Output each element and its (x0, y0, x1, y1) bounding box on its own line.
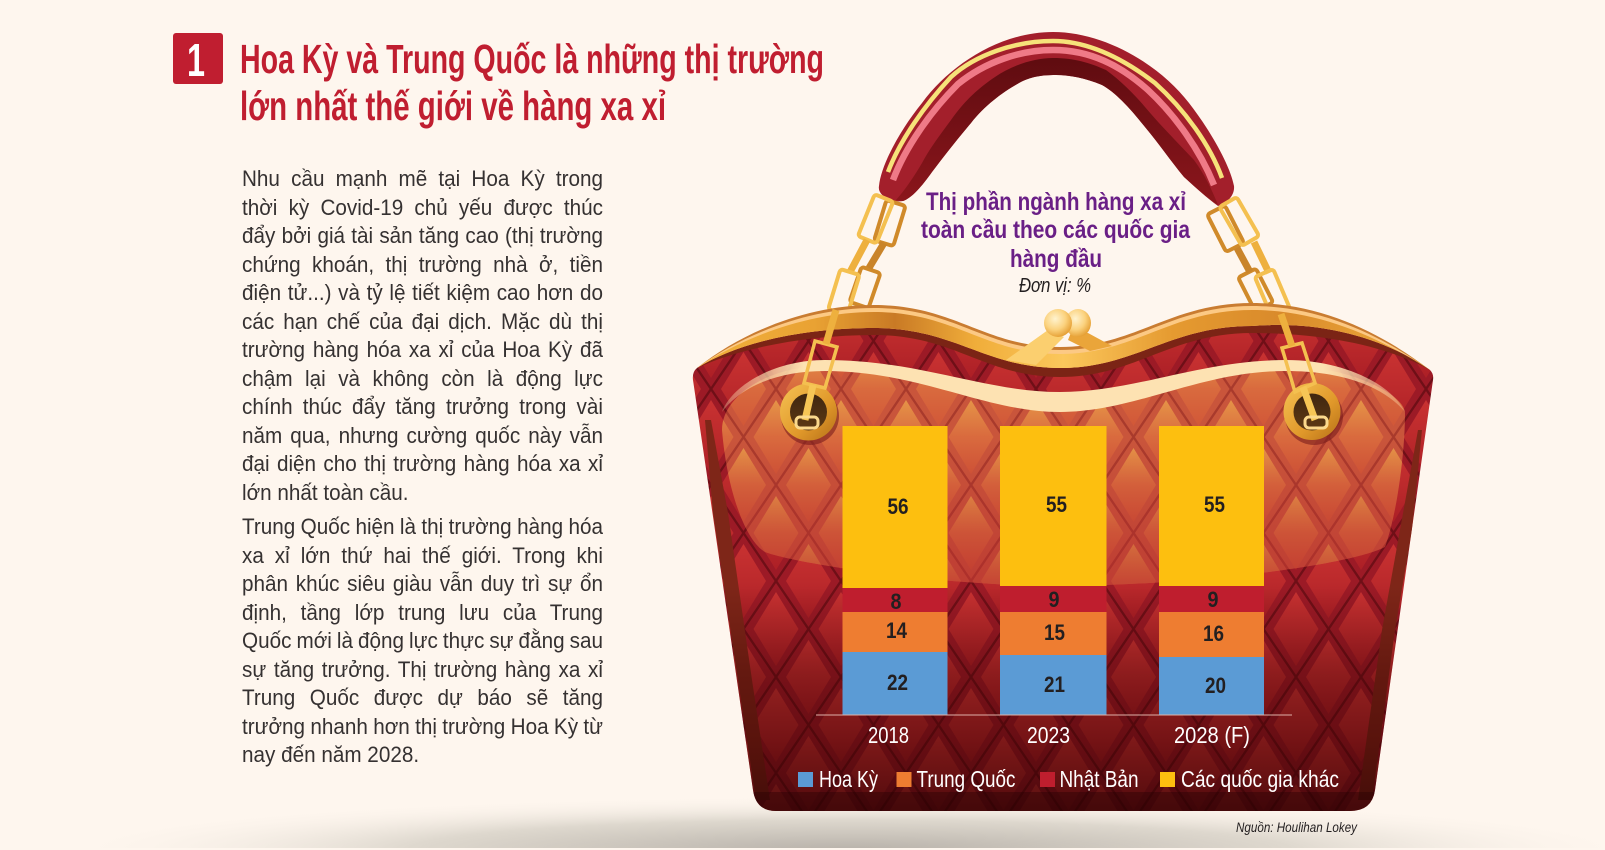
chart title: toàn cầu theo các quốc gia (921, 216, 1191, 244)
body paragraph 1 (242, 166, 603, 505)
cream wave band (722, 360, 1405, 412)
lower shading (726, 600, 1402, 811)
value labels: 16 (1203, 621, 1224, 646)
right grommet (1281, 314, 1343, 445)
bar 2028 (1159, 426, 1264, 715)
value labels: 21 (1044, 672, 1065, 697)
value labels: 20 (1205, 673, 1226, 698)
chart title: Thị phần ngành hàng xa xỉ (926, 188, 1186, 216)
chart title: hàng đầu (1010, 245, 1102, 273)
year labels: 2023 (1027, 722, 1070, 748)
legend (798, 766, 1339, 792)
value labels: 55 (1046, 492, 1067, 517)
body paragraph 1: thời kỳ Covid-19 chủ yếu được thúc (242, 195, 603, 220)
inner light panel (722, 366, 1405, 586)
bar 2023 (1000, 426, 1106, 715)
value labels (886, 492, 1226, 698)
axis line (816, 714, 1292, 716)
body paragraph 2: Trung Quốc được dự báo sẽ tăng (242, 685, 603, 710)
gold frame (697, 303, 1430, 377)
chart title (921, 188, 1191, 273)
body paragraph 2: xa xỉ lớn thứ hai thế giới. Trong khi (242, 543, 603, 568)
body paragraph 1: năm qua, nhưng cường quốc này vẫn (242, 423, 603, 448)
legend: Nhật Bản (1060, 766, 1138, 792)
body paragraph 2: trưởng nhanh hơn thị trường Hoa Kỳ từ (242, 714, 603, 739)
value labels: 9 (1208, 587, 1218, 612)
year labels (868, 722, 1250, 748)
body paragraph 1: Nhu cầu mạnh mẽ tại Hoa Kỳ trong (242, 166, 603, 191)
side seams (705, 420, 770, 800)
title: Hoa Kỳ và Trung Quốc là những thị trường (240, 36, 824, 82)
value labels: 15 (1044, 620, 1065, 645)
body paragraph 1: lớn nhất toàn cầu. (242, 480, 408, 505)
floor shadow (0, 790, 1605, 848)
legend: Các quốc gia khác (1181, 766, 1339, 792)
stacked bar chart (816, 426, 1292, 748)
body paragraph 1: các hạn chế của đại dịch. Mặc dù thị (242, 309, 603, 334)
body paragraph 1: điện tử...) và tỷ lệ tiết kiệm cao hơn do (242, 280, 603, 305)
year labels: 2028 (F) (1174, 722, 1250, 748)
legend: Trung Quốc (916, 766, 1016, 792)
source note: Nguồn: Houlihan Lokey (1236, 819, 1358, 835)
body paragraph 2: phân khúc siêu giàu vẫn duy trì sự ổn (242, 571, 603, 596)
title (240, 36, 824, 129)
year labels: 2018 (868, 722, 909, 748)
legend: Hoa Kỳ (819, 766, 878, 792)
handle (879, 32, 1234, 206)
section number badge: 1 (187, 34, 205, 86)
value labels: 55 (1204, 492, 1225, 517)
value labels: 9 (1048, 587, 1060, 612)
right chain (1207, 197, 1290, 316)
body paragraph 2: nay đến năm 2028. (242, 742, 419, 767)
bag body (692, 325, 1434, 811)
body paragraph 1: chậm lại và không còn là động lực (242, 366, 603, 391)
body paragraph 2 (242, 514, 603, 767)
body paragraph 1: đại diện cho thị trường hàng hóa xa xỉ (242, 451, 603, 476)
chart unit: Đơn vị: % (1019, 275, 1091, 297)
body paragraph 1: đẩy bởi giá tài sản tăng cao (thị trường (242, 223, 603, 248)
body paragraph 2: định, tầng lớp trung lưu của Trung (242, 600, 603, 625)
body paragraph 1: chính thúc đẩy tăng trưởng trong vài (242, 394, 603, 419)
section number badge (173, 33, 223, 86)
value labels: 8 (890, 589, 902, 614)
value labels: 22 (887, 670, 908, 695)
title: lớn nhất thế giới về hàng xa xỉ (240, 83, 666, 129)
bar 2018 (842, 426, 948, 715)
left chain (828, 194, 906, 315)
body paragraph 2: Quốc mới là động lực thực sự đằng sau (242, 628, 603, 653)
body paragraph 2: Trung Quốc hiện là thị trường hàng hóa (242, 514, 603, 539)
clasp (1006, 309, 1112, 365)
value labels: 56 (888, 494, 908, 519)
body paragraph 1: trường hàng hóa xa xỉ của Hoa Kỳ đã (242, 337, 603, 362)
body paragraph 1: chứng khoán, thị trường nhà ở, tiền (242, 252, 603, 277)
body paragraph 2: sự tăng trưởng. Thị trường hàng xa xỉ (242, 657, 603, 682)
handbag illustration (680, 32, 1450, 820)
left grommet (780, 310, 839, 445)
value labels: 14 (886, 618, 908, 643)
